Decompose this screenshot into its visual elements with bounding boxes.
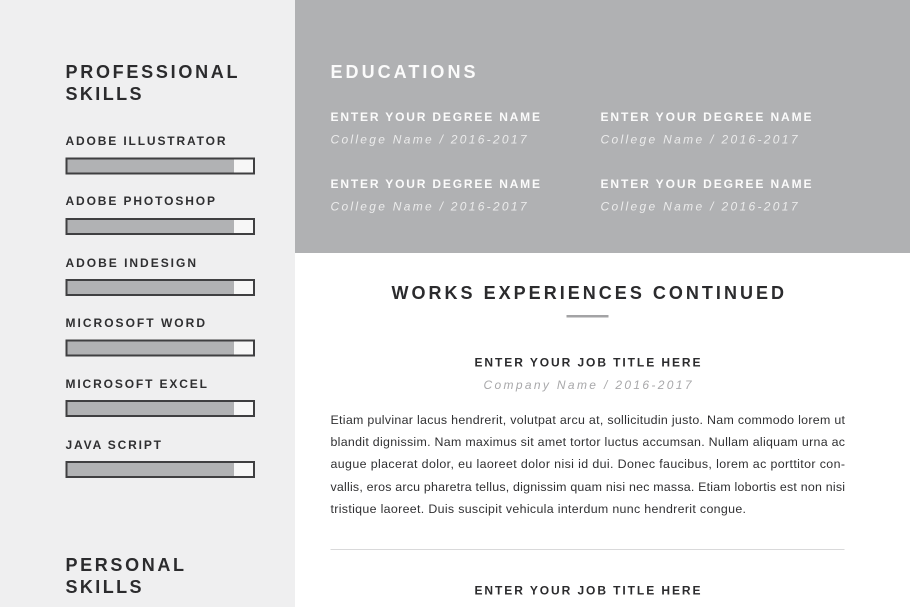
- job description paragraph: blandit dignissim. Nam maximus sit amet tortor luctus accumsan. Nullam aliquam urna ac: [330, 435, 845, 449]
- skill: adobe photoshop: ADOBE PHOTOSHOP: [66, 194, 215, 208]
- job description paragraph: [330, 413, 846, 516]
- skill: adobe illustrator: [66, 134, 254, 174]
- heading: personal skills: SKILLS: [66, 577, 142, 597]
- heading: professional skills: SKILLS: [66, 84, 142, 104]
- skill: adobe indesign: ADOBE INDESIGN: [66, 256, 196, 270]
- heading: personal skills: [66, 555, 184, 597]
- education entry 2: College Name / 2016-2017: [600, 132, 799, 146]
- education entry 4: ENTER YOUR DEGREE NAME: [600, 177, 812, 191]
- heading: professional skills: [66, 62, 238, 104]
- company line: Company Name / 2016-2017: [484, 378, 693, 392]
- panel: sidebar: [0, 0, 295, 607]
- heading: personal skills: PERSONAL: [66, 555, 184, 575]
- section divider: [330, 549, 844, 550]
- job description paragraph: tristique laoreet. Duis suscipit vehicula interdum nunc hendrerit congue.: [330, 502, 746, 516]
- job description paragraph: Etiam pulvinar lacus hendrerit, volutpat arcu at, sollicitudin justo. Nam commodo lorem ut: [330, 413, 846, 427]
- skill: microsoft word: MICROSOFT WORD: [66, 316, 205, 330]
- skill: microsoft excel: MICROSOFT EXCEL: [66, 377, 207, 391]
- education entry 3: ENTER YOUR DEGREE NAME: [330, 177, 540, 191]
- skill: java script: JAVA SCRIPT: [66, 438, 162, 452]
- heading: professional skills: PROFESSIONAL: [66, 62, 238, 82]
- heading underline: [566, 315, 608, 318]
- heading: works experiences continued: WORKS EXPERIENCES CONTINUED: [392, 283, 784, 303]
- skill: adobe indesign: [66, 256, 254, 295]
- education entry 1: College Name / 2016-2017: [330, 132, 528, 146]
- education entry 2: ENTER YOUR DEGREE NAME: [600, 110, 812, 124]
- education entry 1: [330, 110, 540, 146]
- job title 1: ENTER YOUR JOB TITLE HERE: [474, 356, 700, 370]
- education entry 4: [600, 177, 812, 214]
- education entry 2: [600, 110, 812, 146]
- education entry 3: [330, 177, 540, 214]
- skill: microsoft excel: [66, 377, 254, 416]
- skill: adobe photoshop: [66, 194, 254, 234]
- panel: educations: [295, 0, 910, 253]
- skill: adobe illustrator: ADOBE ILLUSTRATOR: [66, 134, 226, 148]
- education entry 3: College Name / 2016-2017: [330, 200, 528, 214]
- job title 2: ENTER YOUR JOB TITLE HERE: [474, 584, 700, 598]
- education entry 1: ENTER YOUR DEGREE NAME: [330, 110, 540, 124]
- job description paragraph: vallis, eros arcu pharetra tellus, dignissim quam nisi nec massa. Etiam lobortis est non nisi: [330, 480, 845, 494]
- education entry 4: College Name / 2016-2017: [600, 200, 799, 214]
- heading: educations: EDUCATIONS: [330, 62, 476, 82]
- job description paragraph: augue placerat dolor, eu laoreet dolor nisi id dui. Donec faucibus, lorem ac porttitor con-: [330, 457, 845, 471]
- skill: microsoft word: [66, 316, 254, 356]
- skill: java script: [66, 438, 254, 477]
